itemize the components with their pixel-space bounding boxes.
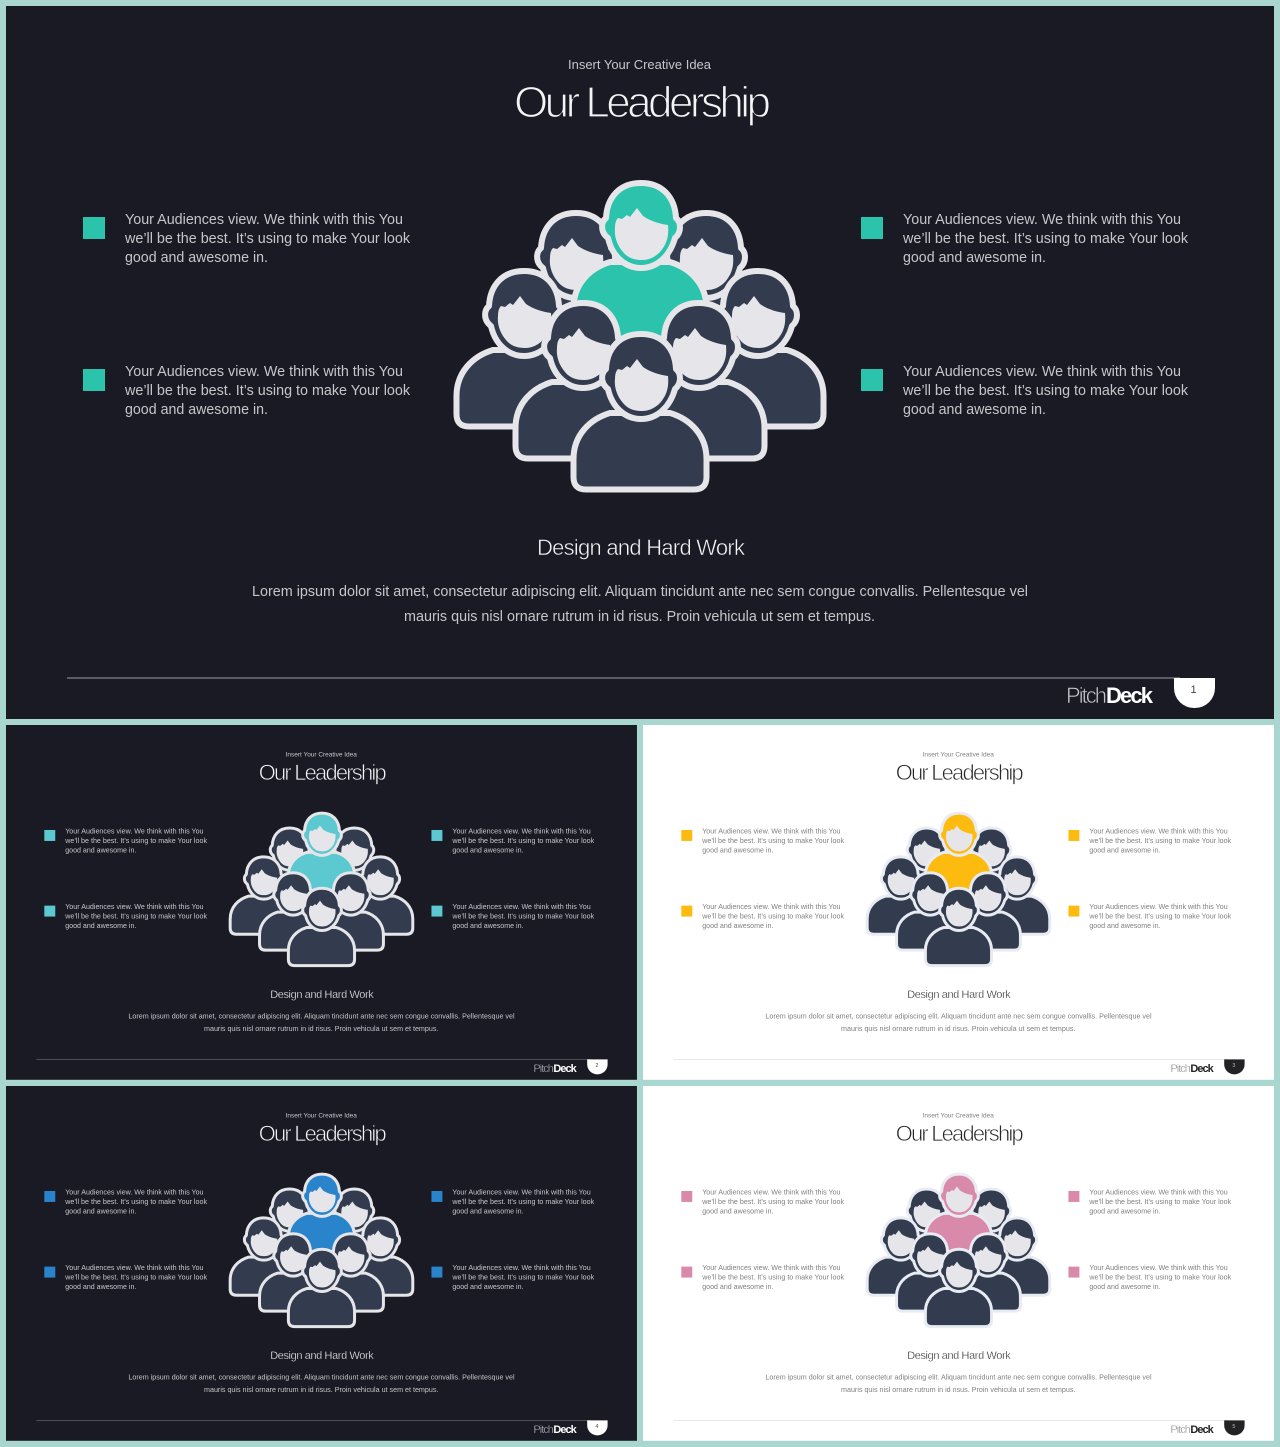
footer: Pitch <box>1066 683 1107 708</box>
paragraph <box>765 1373 1152 1394</box>
subheading: Design and Hard Work <box>907 989 1011 1001</box>
bullet text: top right <box>1068 1187 1231 1215</box>
footer <box>673 1059 1245 1075</box>
bullet text: top right: we’ll be the best. It’s using to make Your look <box>451 1197 594 1206</box>
footer: 2 <box>595 1063 598 1069</box>
bullet text: top left: Your Audiences view. We think with this You <box>65 1187 204 1196</box>
subheading: Design and Hard Work <box>907 1350 1011 1362</box>
bullet text: top left <box>681 1187 844 1215</box>
bullet text: bottom left: Your Audiences view. We think with this You <box>702 902 841 911</box>
bullet text: bottom right: we’ll be the best. It’s using to make Your look <box>902 382 1188 399</box>
bullet text: bottom right: we’ll be the best. It’s using to make Your look <box>1088 912 1231 921</box>
footer: Pitch <box>533 1424 554 1436</box>
slide 1: large dark teal <box>6 6 1274 719</box>
bullet text: top left <box>83 211 410 266</box>
bullet text: bottom right: we’ll be the best. It’s using to make Your look <box>1088 1273 1231 1282</box>
bullet text: bottom right: good and awesome in. <box>903 401 1046 418</box>
bullet text: bottom right: Your Audiences view. We think with this You <box>903 363 1181 380</box>
bullet text: bottom left: good and awesome in. <box>65 1282 136 1291</box>
icon: group of people with highlighted leader <box>867 813 1050 966</box>
bullet text: bottom right: good and awesome in. <box>452 1282 524 1291</box>
eyebrow: Insert Your Creative Idea <box>923 751 994 758</box>
footer: Deck <box>1106 683 1154 708</box>
bullet text: top left: good and awesome in. <box>702 1206 773 1215</box>
icon: group of people with highlighted leader <box>867 1174 1050 1327</box>
bullet text: bottom left: good and awesome in. <box>65 921 136 930</box>
footer: Deck <box>553 1063 578 1075</box>
paragraph: Lorem ipsum dolor sit amet, consectetur adipiscing elit. Aliquam tincidunt ante nec sem congue convallis. Pellentesque vel <box>252 583 1028 600</box>
bullet text: bottom right: we’ll be the best. It’s using to make Your look <box>451 912 594 921</box>
bullet text: bottom right <box>431 902 594 930</box>
bullet text: bottom right: Your Audiences view. We think with this You <box>1089 902 1228 911</box>
bullet text: top left <box>681 826 844 854</box>
bullet text: top left: we’ll be the best. It’s using to make Your look <box>64 836 207 845</box>
bullet text: top right: we’ll be the best. It’s using to make Your look <box>451 836 594 845</box>
title: Our Leadership <box>896 760 1024 785</box>
footer: Pitch <box>533 1063 554 1075</box>
bullet text: bottom left: we’ll be the best. It’s using to make Your look <box>124 382 410 399</box>
bullet text: bottom left <box>44 1263 207 1291</box>
bullet text: top left: we’ll be the best. It’s using to make Your look <box>701 1197 844 1206</box>
paragraph: Lorem ipsum dolor sit amet, consectetur adipiscing elit. Aliquam tincidunt ante nec sem congue convallis. Pellentesque vel <box>765 1373 1152 1382</box>
bullet text: top left: Your Audiences view. We think with this You <box>125 211 403 228</box>
bullet text: bottom right <box>861 363 1188 418</box>
title: Our Leadership <box>259 760 387 785</box>
title: Our Leadership <box>896 1121 1024 1146</box>
paragraph <box>252 583 1028 625</box>
bullet text: top right: we’ll be the best. It’s using to make Your look <box>902 230 1188 247</box>
footer: 3 <box>1232 1063 1235 1069</box>
title: Our Leadership <box>514 78 771 127</box>
footer: Pitch <box>1170 1063 1191 1075</box>
paragraph: mauris quis nisl ornare rutrum in id risus. Proin vehicula ut sem et tempus. <box>404 608 875 625</box>
bullet text: top left: Your Audiences view. We think with this You <box>702 826 841 835</box>
footer <box>67 678 1215 708</box>
bullet text: top right <box>431 826 594 854</box>
slide 5: small light pink <box>643 1086 1274 1441</box>
bullet text: top left: Your Audiences view. We think with this You <box>702 1187 841 1196</box>
slide 3: small light yellow <box>643 725 1274 1080</box>
paragraph: Lorem ipsum dolor sit amet, consectetur adipiscing elit. Aliquam tincidunt ante nec sem congue convallis. Pellentesque vel <box>128 1012 515 1021</box>
bullet text: bottom right: good and awesome in. <box>452 921 524 930</box>
paragraph: mauris quis nisl ornare rutrum in id risus. Proin vehicula ut sem et tempus. <box>204 1385 438 1394</box>
eyebrow: Insert Your Creative Idea <box>568 58 711 72</box>
paragraph: mauris quis nisl ornare rutrum in id risus. Proin vehicula ut sem et tempus. <box>841 1024 1075 1033</box>
footer: Deck <box>1190 1424 1215 1436</box>
subheading: Design and Hard Work <box>270 989 374 1001</box>
bullet text: top right: good and awesome in. <box>1089 845 1161 854</box>
subheading: Design and Hard Work <box>270 1350 374 1362</box>
bullet text: bottom right: we’ll be the best. It’s using to make Your look <box>451 1273 594 1282</box>
paragraph: Lorem ipsum dolor sit amet, consectetur adipiscing elit. Aliquam tincidunt ante nec sem congue convallis. Pellentesque vel <box>765 1012 1152 1021</box>
bullet text: bottom left: we’ll be the best. It’s using to make Your look <box>64 912 207 921</box>
bullet text: bottom left: we’ll be the best. It’s using to make Your look <box>701 1273 844 1282</box>
bullet text: top left: we’ll be the best. It’s using to make Your look <box>124 230 410 247</box>
eyebrow: Insert Your Creative Idea <box>286 751 357 758</box>
bullet text: bottom left <box>681 1263 844 1291</box>
bullet text: top right: Your Audiences view. We think with this You <box>1089 826 1228 835</box>
bullet text: bottom left: we’ll be the best. It’s using to make Your look <box>701 912 844 921</box>
bullet text: top right: good and awesome in. <box>452 845 524 854</box>
bullet text: bottom left <box>44 902 207 930</box>
eyebrow: Insert Your Creative Idea <box>286 1112 357 1119</box>
bullet text: bottom right: Your Audiences view. We think with this You <box>452 902 591 911</box>
paragraph: mauris quis nisl ornare rutrum in id risus. Proin vehicula ut sem et tempus. <box>204 1024 438 1033</box>
bullet text: bottom left: good and awesome in. <box>125 401 268 418</box>
paragraph: mauris quis nisl ornare rutrum in id risus. Proin vehicula ut sem et tempus. <box>841 1385 1075 1394</box>
bullet text: bottom left <box>681 902 844 930</box>
bullet text: top left <box>44 826 207 854</box>
bullet text: top right <box>861 211 1188 266</box>
slide 4: small dark blue <box>6 1086 637 1441</box>
bullet text: bottom right: good and awesome in. <box>1089 921 1161 930</box>
footer: 5 <box>1232 1424 1235 1430</box>
bullet text: bottom right <box>431 1263 594 1291</box>
eyebrow: Insert Your Creative Idea <box>923 1112 994 1119</box>
bullet text: bottom left: good and awesome in. <box>702 921 773 930</box>
footer <box>36 1059 608 1075</box>
bullet text: top left: good and awesome in. <box>702 845 773 854</box>
bullet text: top left: Your Audiences view. We think with this You <box>65 826 204 835</box>
bullet text: bottom right: Your Audiences view. We think with this You <box>1089 1263 1228 1272</box>
slide 2: small dark aqua <box>6 725 637 1080</box>
bullet text: bottom left: Your Audiences view. We think with this You <box>65 902 204 911</box>
footer: 1 <box>1190 684 1197 696</box>
bullet text: top right <box>431 1187 594 1215</box>
bullet text: bottom left: good and awesome in. <box>702 1282 773 1291</box>
bullet text: top left: good and awesome in. <box>65 1206 136 1215</box>
footer: Deck <box>553 1424 578 1436</box>
title: Our Leadership <box>259 1121 387 1146</box>
bullet text: top right: we’ll be the best. It’s using to make Your look <box>1088 1197 1231 1206</box>
bullet text: bottom left: Your Audiences view. We think with this You <box>125 363 403 380</box>
paragraph <box>765 1012 1152 1033</box>
bullet text: top left: good and awesome in. <box>125 249 268 266</box>
footer: 4 <box>595 1424 598 1430</box>
bullet text: bottom right: good and awesome in. <box>1089 1282 1161 1291</box>
paragraph <box>128 1373 515 1394</box>
footer: Pitch <box>1170 1424 1191 1436</box>
bullet text: bottom right <box>1068 1263 1231 1291</box>
bullet text: bottom left: Your Audiences view. We think with this You <box>65 1263 204 1272</box>
bullet text: top left: we’ll be the best. It’s using to make Your look <box>64 1197 207 1206</box>
icon: group of people with highlighted leader <box>230 813 413 966</box>
bullet text: bottom right: Your Audiences view. We think with this You <box>452 1263 591 1272</box>
footer: Deck <box>1190 1063 1215 1075</box>
bullet text: bottom left: we’ll be the best. It’s using to make Your look <box>64 1273 207 1282</box>
bullet text: top right: Your Audiences view. We think with this You <box>452 1187 591 1196</box>
paragraph: Lorem ipsum dolor sit amet, consectetur adipiscing elit. Aliquam tincidunt ante nec sem congue convallis. Pellentesque vel <box>128 1373 515 1382</box>
bullet text: top right: Your Audiences view. We think with this You <box>1089 1187 1228 1196</box>
bullet text: bottom left: Your Audiences view. We think with this You <box>702 1263 841 1272</box>
icon: group of people with highlighted leader <box>230 1174 413 1327</box>
subheading: Design and Hard Work <box>537 535 746 560</box>
paragraph <box>128 1012 515 1033</box>
bullet text: top left <box>44 1187 207 1215</box>
bullet text: top right: Your Audiences view. We think with this You <box>452 826 591 835</box>
bullet text: top right: good and awesome in. <box>1089 1206 1161 1215</box>
bullet text: top right: good and awesome in. <box>903 249 1046 266</box>
bullet text: bottom right <box>1068 902 1231 930</box>
bullet text: top right <box>1068 826 1231 854</box>
icon: group of people with highlighted leader <box>456 183 824 490</box>
footer <box>36 1420 608 1436</box>
bullet text: bottom left <box>83 363 410 418</box>
bullet text: top left: good and awesome in. <box>65 845 136 854</box>
bullet text: top right: good and awesome in. <box>452 1206 524 1215</box>
bullet text: top left: we’ll be the best. It’s using to make Your look <box>701 836 844 845</box>
bullet text: top right: Your Audiences view. We think with this You <box>903 211 1181 228</box>
footer <box>673 1420 1245 1436</box>
bullet text: top right: we’ll be the best. It’s using to make Your look <box>1088 836 1231 845</box>
